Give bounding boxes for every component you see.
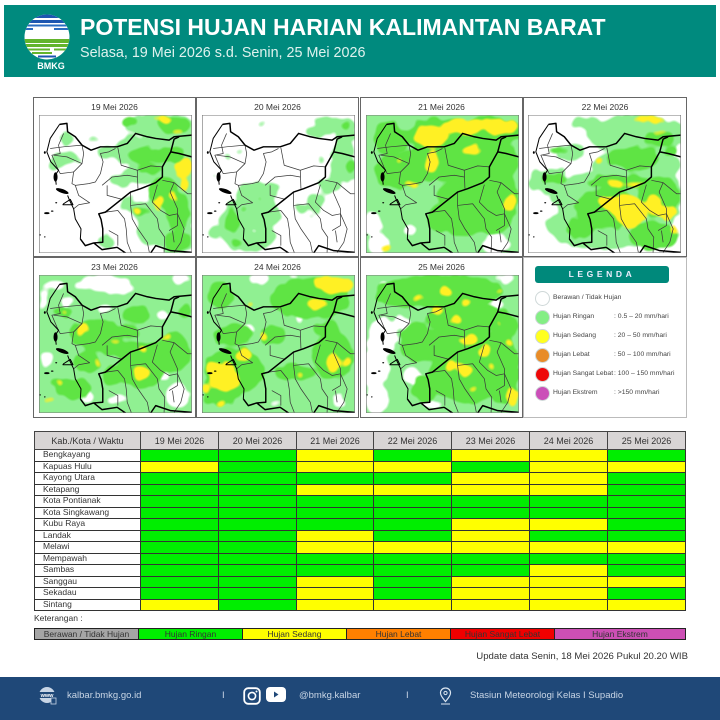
panel: map 24 Mei 2026 — [196, 257, 359, 418]
legend item: ekstrem — [534, 386, 550, 400]
panel: map 22 Mei 2026: 22 Mei 2026 — [582, 102, 628, 112]
rainfall table: 22 Mei 2026 — [388, 436, 437, 446]
panel: map 25 Mei 2026 — [360, 257, 523, 418]
legend label: lebat — [553, 351, 671, 358]
key: ringan: Hujan Ringan — [165, 629, 216, 639]
icon: BMKG logo — [24, 14, 70, 60]
legend heading — [535, 266, 669, 283]
icon: youtube — [266, 687, 286, 702]
rainfall table: 20 Mei 2026 — [233, 436, 282, 446]
rainfall table: 21 Mei 2026 — [310, 436, 360, 446]
panel: map 25 Mei 2026: 25 Mei 2026 — [418, 262, 465, 272]
key: lebat: Hujan Lebat — [376, 629, 421, 639]
footer separator: I — [222, 690, 225, 700]
keterangan label: Keterangan : — [34, 613, 83, 623]
legend label: ringan — [553, 313, 669, 320]
rainfall table: 19 Mei 2026 — [155, 436, 204, 446]
panel: map 20 Mei 2026 — [196, 97, 359, 257]
update note: Update data Senin, 18 Mei 2026 Pukul 20.20 WIB — [476, 651, 688, 662]
key: ringan — [138, 628, 243, 640]
panel: map 23 Mei 2026 — [33, 257, 196, 418]
rainfall table — [34, 431, 686, 611]
header banner — [4, 5, 716, 77]
legend item: sedang — [534, 328, 550, 344]
footer separator: I — [406, 690, 409, 700]
legend item: berawan — [534, 290, 550, 306]
icon: globe www: www — [40, 693, 54, 699]
panel: map 21 Mei 2026 — [360, 97, 523, 257]
legend label: sangat lebat: Hujan Sangat Lebat — [553, 370, 613, 377]
key: ekstrem — [554, 628, 686, 640]
key: ekstrem: Hujan Ekstrem — [592, 629, 648, 639]
legend label: ekstrem: Hujan Ekstrem — [553, 389, 598, 396]
key: berawan: Berawan / Tidak Hujan — [44, 629, 129, 639]
text: : >150 mm/hari — [614, 389, 660, 396]
text: : 50 – 100 mm/hari — [614, 351, 671, 358]
legend label: ringan: Hujan Ringan — [553, 313, 594, 320]
legend label: sangat lebat — [553, 370, 674, 377]
footer station name: Stasiun Meteorologi Kelas I Supadio — [470, 690, 623, 700]
legend item: ringan — [534, 310, 550, 324]
key: sangat lebat: Hujan Sangat Lebat — [465, 629, 540, 639]
rainfall table: 23 Mei 2026 — [466, 436, 515, 446]
footer website: kalbar.bmkg.go.id — [67, 690, 141, 700]
legend item: sangat lebat — [534, 366, 550, 382]
icon: instagram — [243, 687, 261, 705]
legend label: berawan: Berawan / Tidak Hujan — [553, 294, 621, 301]
icon: globe www — [40, 687, 56, 704]
key: lebat — [346, 628, 451, 640]
text: : 20 – 50 mm/hari — [614, 332, 667, 339]
icon: location pin — [440, 687, 452, 704]
rainfall table: 25 Mei 2026 — [622, 436, 671, 446]
panel: map 21 Mei 2026: 21 Mei 2026 — [418, 102, 465, 112]
key: sedang — [242, 628, 347, 640]
title: POTENSI HUJAN HARIAN KALIMANTAN BARAT — [80, 14, 606, 40]
legend heading: LEGENDA — [569, 269, 635, 279]
text: : 0.5 – 20 mm/hari — [614, 313, 669, 320]
legend label: sedang: Hujan Sedang — [553, 332, 596, 339]
legend label: sedang — [553, 332, 667, 339]
panel: map 20 Mei 2026: 20 Mei 2026 — [254, 102, 301, 112]
rainfall table: Kab./Kota / Waktu — [51, 436, 124, 446]
logo label: BMKG — [37, 61, 65, 71]
legend label: lebat: Hujan Lebat — [553, 351, 590, 358]
panel: legenda — [523, 257, 687, 418]
panel: map 23 Mei 2026: 23 Mei 2026 — [91, 262, 138, 272]
key: berawan — [34, 628, 139, 640]
panel: map 19 Mei 2026: 19 Mei 2026 — [91, 102, 138, 112]
panel: map 19 Mei 2026 — [33, 97, 196, 257]
legend item: lebat — [534, 348, 550, 362]
panel: map 22 Mei 2026 — [523, 97, 687, 257]
key: sedang: Hujan Sedang — [268, 629, 321, 639]
panel: map 24 Mei 2026: 24 Mei 2026 — [254, 262, 301, 272]
footer social handle: @bmkg.kalbar — [299, 690, 360, 700]
legend label: ekstrem — [553, 389, 660, 396]
key: sangat lebat — [450, 628, 555, 640]
text: : 100 – 150 mm/hari — [614, 370, 674, 377]
rainfall table: 24 Mei 2026 — [544, 436, 593, 446]
subtitle: Selasa, 19 Mei 2026 s.d. Senin, 25 Mei 2026 — [80, 45, 365, 61]
footer bar — [0, 677, 720, 720]
